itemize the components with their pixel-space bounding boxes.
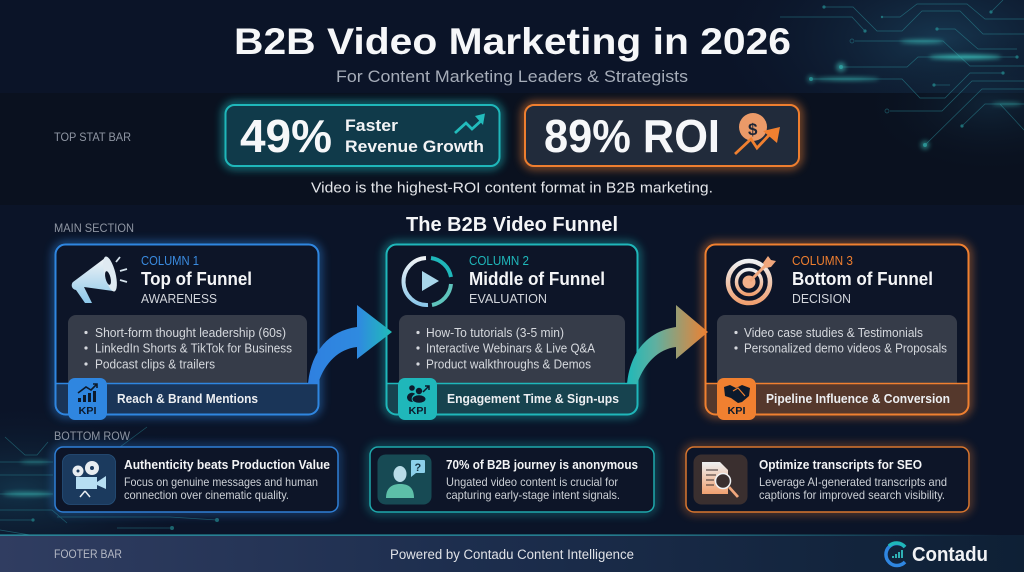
- footer bar: [0, 534, 1024, 572]
- insight card: authenticity: connection over cinematic quality.: [124, 488, 289, 502]
- panel: column 1 top of funnel: Top of Funnel: [141, 268, 252, 289]
- stat card: 49% faster revenue growth: 49%: [240, 110, 332, 162]
- stat card: 49% faster revenue growth: [226, 105, 500, 166]
- content list: Short-form thought leadership (60s): [95, 326, 286, 340]
- panel: column 1 top of funnel: [55, 244, 319, 420]
- icon: megaphone: [72, 255, 127, 303]
- KPI strip: Engagement Time & Sign-ups: [447, 391, 619, 406]
- insight card: anonymous journey: [370, 447, 654, 512]
- icon: video play ring: [404, 258, 451, 305]
- insight card: authenticity: Focus on genuine messages and human: [124, 475, 318, 489]
- insight card: transcripts SEO: captions for improved search visibility.: [759, 488, 945, 502]
- KPI strip: Pipeline Influence & Conversion: [766, 391, 950, 406]
- decorative circuit lines bottom left: [0, 427, 219, 535]
- panel: column 1 top of funnel: COLUMN 1: [141, 254, 199, 268]
- arrow: column 1 to column 2: [308, 305, 392, 384]
- panel: column 2 middle of funnel: EVALUATION: [469, 291, 547, 306]
- label: top stat bar: TOP STAT BAR: [54, 132, 131, 144]
- stat band background: [0, 35, 1024, 205]
- insight card: authenticity: Authenticity beats Production Value: [124, 457, 330, 472]
- insight card: anonymous journey: Ungated video content is crucial for: [446, 475, 618, 489]
- KPI badge: [398, 378, 437, 420]
- KPI badge: KPI: [78, 405, 97, 417]
- insight card: anonymous journey: capturing early-stage intent signals.: [446, 488, 620, 502]
- content list: Podcast clips & trailers: [95, 358, 215, 372]
- KPI badge: [717, 378, 756, 420]
- subtitle: For Content Marketing Leaders & Strategists: [336, 67, 688, 86]
- label: bottom row: BOTTOM ROW: [54, 431, 130, 443]
- KPI strip: Reach & Brand Mentions: [117, 391, 258, 406]
- insight card: transcripts SEO: Optimize transcripts for SEO: [759, 457, 922, 472]
- powered by text: Powered by Contadu Content Intelligence: [390, 547, 634, 562]
- arrow: column 2 to column 3: [627, 305, 708, 384]
- icon: dollar coin and rising arrow: $: [748, 120, 758, 139]
- label: footer bar: FOOTER BAR: [54, 549, 122, 561]
- icon: growth arrow: [455, 114, 485, 133]
- funnel heading: The B2B Video Funnel: [406, 213, 618, 236]
- icon: anonymous person with question bubble: ?: [414, 462, 422, 474]
- KPI strip: [706, 384, 968, 414]
- KPI badge: KPI: [408, 405, 427, 417]
- insight card: authenticity: [55, 447, 338, 512]
- content list: Video case studies & Testimonials: [744, 326, 923, 340]
- logo: Contadu: Contadu: [912, 544, 988, 566]
- decorative glow streaks top right: [807, 40, 1022, 150]
- content list: [717, 315, 957, 383]
- panel: column 3 bottom of funnel: [705, 244, 969, 420]
- panel: column 2 middle of funnel: COLUMN 2: [469, 254, 529, 268]
- label: main section: MAIN SECTION: [54, 223, 134, 235]
- logo: Contadu: [886, 543, 988, 566]
- panel: column 3 bottom of funnel: COLUMN 3: [792, 254, 853, 268]
- content list: [68, 315, 307, 383]
- title: B2B Video Marketing in 2026: [234, 21, 791, 62]
- KPI strip: [56, 384, 318, 414]
- content list: [399, 315, 625, 383]
- KPI strip: [386, 384, 638, 414]
- KPI badge: [68, 378, 107, 420]
- stat card: 89% ROI: 89% ROI: [544, 110, 720, 162]
- insight card: transcripts SEO: Leverage AI-generated transcripts and: [759, 475, 947, 489]
- stat card: 89% ROI: [525, 105, 799, 166]
- panel: column 3 bottom of funnel: DECISION: [792, 291, 851, 306]
- stat card: 49% faster revenue growth: Revenue Growth: [345, 137, 484, 156]
- icon: document with magnifier: [694, 454, 748, 504]
- panel: column 2 middle of funnel: Middle of Funnel: [469, 268, 605, 289]
- panel: column 1 top of funnel: AWARENESS: [141, 291, 217, 306]
- content list: LinkedIn Shorts & TikTok for Business: [95, 342, 292, 356]
- decorative circuit lines top right: [780, 0, 1024, 147]
- content list: Product walkthroughs & Demos: [426, 358, 591, 372]
- KPI badge: KPI: [728, 405, 746, 417]
- icon: target with arrow: [728, 256, 776, 303]
- icon: dollar coin and rising arrow: [735, 113, 780, 154]
- panel: column 3 bottom of funnel: Bottom of Funnel: [792, 268, 933, 289]
- insight card: anonymous journey: 70% of B2B journey is anonymous: [446, 457, 638, 472]
- panel: column 2 middle of funnel: [386, 244, 638, 420]
- decorative glow streaks bottom left: [3, 461, 53, 496]
- stat card: 49% faster revenue growth: Faster: [345, 116, 398, 135]
- icon: film camera: [62, 454, 116, 504]
- insight card: transcripts SEO: [686, 447, 969, 512]
- stat caption: Video is the highest-ROI content format in B2B marketing.: [311, 180, 713, 196]
- content list: Personalized demo videos & Proposals: [744, 342, 947, 356]
- content list: How-To tutorials (3-5 min): [426, 326, 564, 340]
- content list: Interactive Webinars & Live Q&A: [426, 342, 596, 356]
- icon: anonymous person with question bubble: [378, 454, 432, 504]
